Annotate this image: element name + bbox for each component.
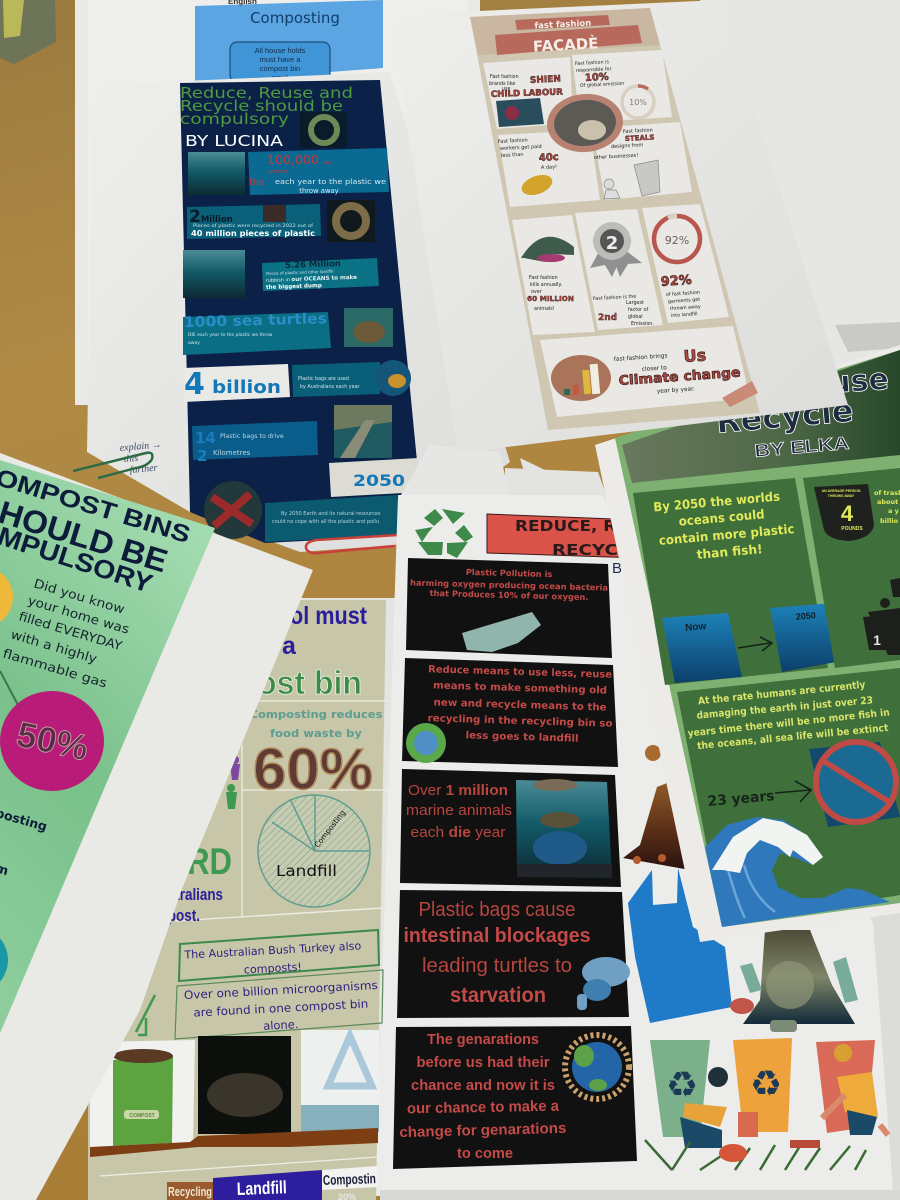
panel: 10 percent: Fast fashion is xyxy=(575,59,610,67)
ocean image 1 xyxy=(188,152,245,195)
globe icon xyxy=(375,360,411,396)
panel: kills animals: animals! xyxy=(534,306,555,312)
stat: 2 million: Pieces of plastic were recycled in 2022 out of xyxy=(193,223,314,228)
panel: generations: change for genarations xyxy=(399,1120,567,1141)
stat: 14 plastic bags xyxy=(192,421,318,465)
panel: reduce means: means to make something old xyxy=(433,680,607,697)
panel: 2050 oceans: By 2050 the worlds xyxy=(653,489,781,515)
2050 image: 2050 xyxy=(795,610,816,622)
crossed earth icon xyxy=(204,481,262,539)
2050 box: 2050 xyxy=(353,471,405,490)
octopus xyxy=(623,745,690,870)
title remnant: Recycle xyxy=(714,391,855,441)
arrow xyxy=(738,637,772,651)
panel: plastic bags cause blockages xyxy=(397,890,630,1018)
panel: steals designs: designs from xyxy=(611,142,644,150)
panel: 92 percent xyxy=(642,204,729,323)
4 pounds badge: AN AVERAGE PERSON xyxy=(822,489,861,493)
checkbox icon xyxy=(136,995,155,1035)
red paperclip xyxy=(306,535,398,553)
bar chart in circle xyxy=(551,355,611,401)
poster: Reduce Reuse Recycle by Lucina xyxy=(180,80,421,543)
plastic bags used note: Plastic bags are used xyxy=(298,376,349,382)
stat: 1000 sea turtles: DIE each year to the plastic we throw xyxy=(188,332,273,338)
stat: 5.26 million: the biggest dump xyxy=(266,283,322,291)
title remnant xyxy=(714,362,890,441)
globe recycle icon xyxy=(406,723,446,763)
panel: reduce means: less goes to landfill xyxy=(465,730,579,745)
panel: 40c a day xyxy=(498,130,600,207)
panel: rate humans: damaging the earth in just over 23 xyxy=(696,695,873,722)
bush turkey callout xyxy=(179,930,379,981)
fast fashion label xyxy=(515,15,610,31)
heading: ol must xyxy=(290,602,368,630)
handwritten note xyxy=(119,439,162,476)
bush turkey callout: The Australian Bush Turkey also xyxy=(183,939,362,962)
bars: recycling landfill composting: Recycling xyxy=(168,1184,212,1199)
stat: 14 plastic bags: 2 xyxy=(197,447,207,465)
pie chart: composting vs landfill xyxy=(258,795,370,907)
stat: 5.26 million: 5.26 Million xyxy=(285,259,341,271)
compost bin photo: COMPOST xyxy=(129,1113,155,1119)
stat: 14 plastic bags: 14 xyxy=(195,429,216,447)
now image xyxy=(662,613,742,683)
panel dividers xyxy=(100,701,388,1176)
byline: BY LUCINA xyxy=(185,132,284,150)
brown shelf xyxy=(90,1128,378,1157)
paper under Lucina poster xyxy=(87,72,510,552)
92 percent donut: 92% xyxy=(665,234,689,247)
orange recycling bin: ♻ xyxy=(750,1063,782,1104)
panel: child labour: brands like xyxy=(489,81,515,87)
panel: child labour: Fast fashion xyxy=(490,74,519,80)
stat: 2 million: 40 million pieces of plastic xyxy=(191,229,315,238)
pie chart: composting vs landfill: Composting xyxy=(312,808,347,849)
panel: 92 percent: thrown away xyxy=(670,304,701,312)
seal xyxy=(730,930,858,1032)
panel: plastic pollution xyxy=(406,558,612,658)
stat: 4 billion: billion xyxy=(212,377,281,398)
green recycling bin: ♻ xyxy=(666,1064,698,1105)
river photo header xyxy=(622,350,900,483)
panel: 4 pounds xyxy=(803,468,900,668)
panel: climate change xyxy=(540,326,758,417)
10 percent donut: 10% xyxy=(629,98,647,107)
poster: fast fashion facade xyxy=(470,8,760,430)
yellow circle xyxy=(0,567,13,627)
stat: 4 billion xyxy=(183,364,290,402)
panel: 10 percent: 10% xyxy=(585,72,609,84)
stat: 100,000 sea animals: 100,000 sea xyxy=(267,152,331,167)
panel: 2nd factor: 2nd xyxy=(598,313,617,323)
panel: generations: chance and now it is xyxy=(411,1077,555,1094)
panel: reduce means xyxy=(402,658,618,767)
waste items on the grass xyxy=(719,1140,820,1162)
green recycling bin xyxy=(650,1040,710,1137)
panel: 10 percent xyxy=(572,50,672,123)
facade banner: FACADÈ xyxy=(533,33,599,56)
panel: generations: before us had their xyxy=(416,1054,550,1071)
central clothes pile image xyxy=(545,91,625,155)
panel: 4 pounds: billio xyxy=(880,517,899,525)
one third text: compost. xyxy=(140,906,200,925)
stat: 1000 sea turtles: away xyxy=(188,341,200,346)
poster: compost bins should be compulsory xyxy=(0,458,215,1033)
person with hard hat xyxy=(822,1044,888,1135)
23 years label xyxy=(707,781,811,810)
panel: 2nd factor xyxy=(575,209,663,330)
fast fashion paper xyxy=(390,0,848,453)
panel: reduce means: new and recycle means to the xyxy=(433,697,607,714)
stat: 100,000 sea animals: each year to the plastic we xyxy=(275,178,386,186)
panel: plastic bags cause blockages: starvation xyxy=(450,984,546,1007)
body text: flammable gas xyxy=(1,645,109,691)
poster: reduce reuse recycle by Elka xyxy=(615,350,900,927)
panel: steals designs: other businesses! xyxy=(594,153,638,161)
composting poster: All house holds xyxy=(255,46,306,55)
one third text xyxy=(137,841,232,925)
lower right paper with illustrations xyxy=(375,495,900,1200)
red recycling bin xyxy=(816,1040,875,1133)
panel: climate change: Us xyxy=(683,345,707,366)
composting poster: must have a xyxy=(260,55,301,64)
plastic bag xyxy=(628,868,732,1023)
panel: 92 percent: into landfill xyxy=(671,311,698,319)
header photo xyxy=(470,8,660,55)
body text xyxy=(1,575,131,691)
panel: 4 pounds: 1 xyxy=(873,632,881,648)
handwritten note: explain → xyxy=(119,439,162,454)
one third text: Australians xyxy=(150,885,223,904)
people icons xyxy=(226,756,240,809)
composting poster: now! xyxy=(272,73,288,82)
bush turkey callout: composts! xyxy=(244,960,302,977)
teal circle xyxy=(0,927,8,993)
title: compulsory xyxy=(180,110,289,128)
stat: 100,000 sea animals xyxy=(248,148,389,195)
landfill dark photo xyxy=(198,1036,291,1134)
2050 note: By 2050 Earth and its natural resources xyxy=(281,511,381,517)
ocean image 2 xyxy=(183,250,245,298)
panel: kills animals: over xyxy=(531,289,542,295)
4 pounds badge xyxy=(814,484,874,541)
stat: 1000 sea turtles: 1000 sea turtles xyxy=(184,311,327,331)
panel: climate change: closer to xyxy=(642,365,668,373)
panel: reduce means: Reduce means to use less, reuse xyxy=(428,664,612,681)
panel: 1 million marine animals xyxy=(400,769,621,887)
background paper stack, top right xyxy=(700,0,900,420)
panel: 4 pounds: a y xyxy=(888,507,900,515)
recycle thumbnail xyxy=(300,112,347,148)
panel: plastic bags cause blockages: leading turtles to xyxy=(422,955,572,977)
body text: with a highly xyxy=(9,626,99,666)
panel: 2nd factor: factor of xyxy=(628,307,649,313)
panel: 10 percent: Of global emission xyxy=(580,81,624,89)
panel: 92 percent: of fast fashion xyxy=(666,290,700,298)
school poster backing paper xyxy=(200,598,398,1200)
panel: composting reduces food waste: Composting reduces xyxy=(250,709,382,721)
stat: 100,000 sea animals: throw away xyxy=(299,187,339,195)
plastic bottle recycle photo xyxy=(301,1030,379,1132)
panel: generations: to come xyxy=(457,1145,513,1162)
panel: child labour: CHILD LABOUR xyxy=(491,87,563,100)
panel: child labour xyxy=(483,57,573,129)
panel: composting reduces food waste xyxy=(250,709,382,802)
panel: generations xyxy=(393,1026,637,1169)
panel: kills animals: 60 MILLION xyxy=(527,294,574,303)
title xyxy=(180,84,353,128)
panel: climate change: year by year. xyxy=(657,386,695,395)
heading: a xyxy=(282,632,297,660)
panel: steals designs xyxy=(592,122,692,200)
stat: 100,000 sea animals: Die xyxy=(249,178,264,188)
panel: plastic pollution: that Produces 10% of our oxygen. xyxy=(429,588,589,602)
heading: compost bin: ost bin xyxy=(257,664,362,701)
facade banner xyxy=(495,25,642,56)
plastic bags used note xyxy=(292,362,380,397)
title remnant: use xyxy=(828,362,890,401)
bars: recycling landfill composting xyxy=(167,1166,377,1200)
stat: 5.26 million xyxy=(262,258,379,291)
scrap papers behind xyxy=(398,445,610,505)
panel: kills animals: Fast fashion xyxy=(529,275,558,281)
panel: 2050 oceans: contain more plastic xyxy=(658,521,795,548)
heading xyxy=(0,458,193,599)
one third text: THIRD xyxy=(137,841,232,882)
byline letter: B xyxy=(612,560,622,577)
panel: reduce means: recycling in the recycling bin so xyxy=(427,713,613,730)
panel: child labour: SHIEN xyxy=(530,74,561,86)
23 years label: 23 years xyxy=(707,788,775,810)
composting poster: Composting xyxy=(250,9,340,27)
panel: 4 pounds: about xyxy=(877,498,898,506)
bars: recycling landfill composting: Compostin xyxy=(323,1170,376,1188)
panel: 40c a day: A day! xyxy=(541,164,557,171)
50 percent pink circle xyxy=(0,691,104,791)
poster: reduce reuse recycle red and black xyxy=(393,509,665,1169)
recycle symbol xyxy=(415,509,473,558)
microorganisms callout: alone. xyxy=(263,1017,299,1033)
stat: 100,000 sea animals: animals xyxy=(267,169,289,175)
trash bin and figure xyxy=(863,578,900,655)
connector line xyxy=(0,671,18,705)
panel: 92 percent: garments get xyxy=(668,297,700,305)
no fishing ocean image xyxy=(809,742,900,827)
title: Reduce, Reuse and xyxy=(180,84,353,102)
body text: Did you know xyxy=(32,575,127,617)
Elka paper xyxy=(595,345,900,942)
front paper with compost bins poster xyxy=(0,453,313,1200)
fast fashion label: fast fashion xyxy=(534,19,592,31)
handwritten note: further xyxy=(129,463,158,476)
panel: climate change: fast fashion brings xyxy=(614,353,668,363)
poster heading: REDUCE, REUSE xyxy=(515,517,665,535)
grass xyxy=(645,1140,866,1170)
panel: 40c a day: less than xyxy=(501,152,524,159)
globe with people ring xyxy=(565,1035,629,1099)
orange recycling bin xyxy=(733,1038,792,1132)
panel: 92 percent: 92% xyxy=(660,273,692,290)
microorganisms callout: Over one billion microorganisms xyxy=(184,978,378,1002)
glass jar in the corner xyxy=(0,0,56,64)
panel: 2nd factor: Emission. xyxy=(631,321,654,327)
heading xyxy=(282,602,368,660)
panel: 2050 oceans xyxy=(633,478,847,685)
poster heading: RECYCLE xyxy=(552,541,642,559)
turtle with plastic image xyxy=(516,779,612,878)
stat: 5.26 million: Pieces of plastic and other landfill xyxy=(266,269,333,276)
microorganisms callout xyxy=(175,970,383,1039)
4 pounds badge: THROWS AWAY xyxy=(828,494,855,498)
recycle image xyxy=(327,200,375,242)
stat: 14 plastic bags: Plastic bags to drive xyxy=(220,433,284,440)
poster heading xyxy=(487,514,665,559)
stat: 2 million xyxy=(187,204,321,239)
stat: 1000 sea turtles xyxy=(183,311,331,355)
microorganisms callout: are found in one compost bin xyxy=(193,996,369,1020)
panel: 40c a day: workers get paid xyxy=(500,144,542,152)
panel: plastic bags cause blockages: intestinal blockages xyxy=(404,925,590,947)
person sorting waste xyxy=(680,1067,758,1148)
panel: kills animals: kills annually. xyxy=(530,282,562,288)
bars: recycling landfill composting: Landfill xyxy=(236,1177,287,1199)
4 pounds badge: POUNDS xyxy=(841,526,863,532)
byline: BY ELKA xyxy=(754,433,850,461)
panel: 40c a day: Fast fashion xyxy=(498,137,528,145)
stat: 2 million: 2Million xyxy=(189,207,233,227)
back paper with composting poster xyxy=(75,0,480,405)
panel: 1 million marine animals: marine animals xyxy=(406,802,512,819)
body text: filled EVERYDAY xyxy=(17,608,124,653)
panel: 2nd factor: Largest xyxy=(626,300,644,306)
panel: rate humans xyxy=(677,668,900,925)
2050 box xyxy=(329,458,421,497)
2050 note: could no cope with all the plastic and pollu xyxy=(272,519,379,525)
panel: composting reduces food waste: 60% xyxy=(253,737,373,802)
panel: 2nd factor: Fast fashion is the xyxy=(593,294,636,302)
plastic bags on beach image xyxy=(334,405,392,458)
panel: child labour: use xyxy=(502,87,511,92)
turtle in bag image xyxy=(344,308,393,347)
panel: 40c a day: 40c xyxy=(539,152,559,164)
ribbon medal: 2 xyxy=(606,233,618,254)
panel: composting reduces food waste: food waste by xyxy=(270,727,362,740)
poster: school must have a compost bin xyxy=(88,600,388,1200)
blue turtle xyxy=(577,957,630,1010)
panel: 10 percent: responsible for xyxy=(576,66,612,74)
panel: 2nd factor: global xyxy=(628,314,643,320)
title: Recycle should be xyxy=(180,97,343,115)
now image: Now xyxy=(685,621,707,634)
stat: 5.26 million: rubbish in our OCEANS to make xyxy=(266,275,357,284)
panel: generations: The genarations xyxy=(427,1031,539,1048)
panel: 2050 oceans: than fish! xyxy=(696,541,763,562)
panel: rate humans: At the rate humans are currently xyxy=(698,680,866,707)
composting poster xyxy=(195,0,383,82)
panel: generations: our chance to make a xyxy=(407,1098,560,1117)
plastic bags used note: by Australians each year xyxy=(300,384,360,390)
green paperclip xyxy=(73,453,152,478)
wave illustration xyxy=(705,817,890,927)
pie chart: composting vs landfill: Landfill xyxy=(276,862,337,880)
gold coin xyxy=(519,171,555,199)
2050 image xyxy=(770,603,847,672)
panel: plastic pollution: harming oxygen producing ocean bacteria xyxy=(410,577,608,593)
panel: kills animals xyxy=(512,215,595,335)
compost bin photo xyxy=(90,1040,195,1150)
panel: plastic pollution: Plastic Pollution is xyxy=(466,567,553,579)
handwritten note: this xyxy=(123,453,139,465)
panel: 1 million marine animals: each die year xyxy=(410,824,506,841)
2050 note xyxy=(265,495,400,542)
panel: steals designs: STEALS xyxy=(625,133,655,143)
4 pounds badge: 4 xyxy=(841,501,854,526)
stat: 14 plastic bags: Kilometres xyxy=(213,449,251,457)
panel: 1 million marine animals: Over 1 million xyxy=(408,782,508,799)
panel: climate change: Climate change xyxy=(618,366,741,389)
stat: 4 billion: 4 xyxy=(184,367,205,402)
panel: steals designs: Fast fashion xyxy=(623,127,653,135)
composting poster: compost bin xyxy=(260,64,300,73)
panel: plastic bags cause blockages: Plastic bags cause xyxy=(418,899,576,921)
body text: your home was xyxy=(26,592,131,637)
50 percent pink circle: 50% xyxy=(13,713,92,768)
panel: 2050 oceans: oceans could xyxy=(678,506,765,529)
